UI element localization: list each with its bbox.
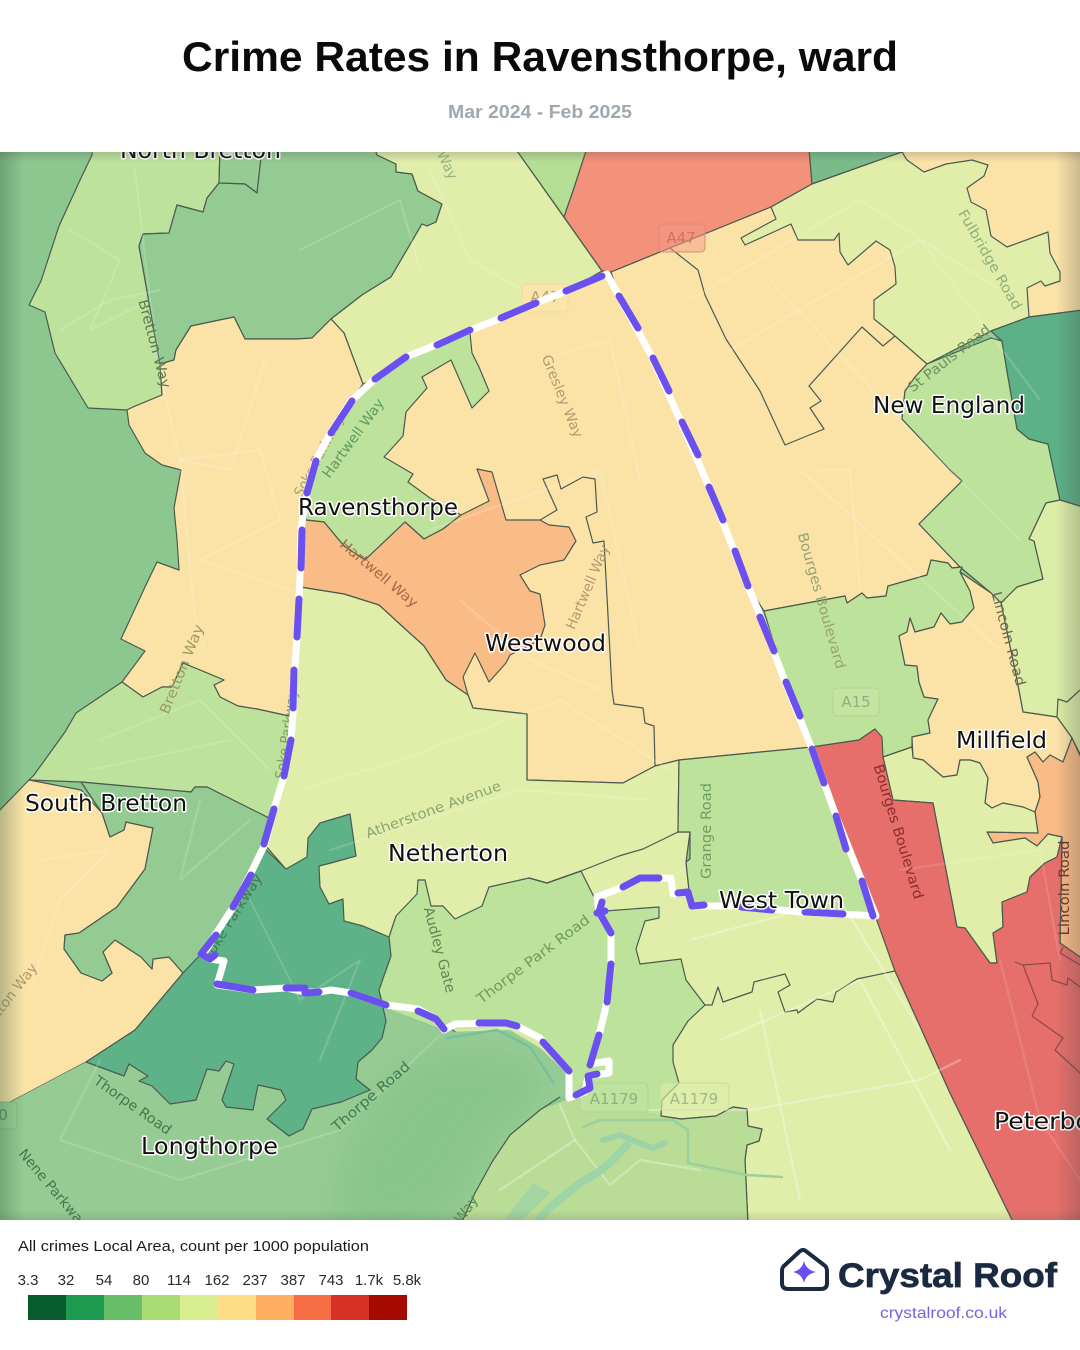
legend tick labels: 162 bbox=[204, 1272, 230, 1289]
road shields bbox=[0, 224, 879, 1129]
place labels: North Bretton bbox=[120, 138, 281, 164]
road labels: Soke Parkway bbox=[273, 689, 301, 780]
legend tick labels: 80 bbox=[133, 1272, 149, 1289]
road labels: St Pauls Road bbox=[905, 322, 994, 396]
place labels: Ravensthorpe bbox=[298, 495, 458, 521]
place labels bbox=[25, 138, 1080, 1160]
road labels: Bourges Boulevard bbox=[794, 531, 848, 671]
road shields: A15 bbox=[841, 693, 871, 711]
road labels: Atherstone Avenue bbox=[364, 778, 504, 842]
ward boundary: purple dashes bbox=[201, 276, 873, 1095]
road shields: A1179 bbox=[590, 1090, 638, 1108]
legend tick labels: 1.7k bbox=[355, 1272, 384, 1289]
legend tick labels: 3.3 bbox=[18, 1272, 38, 1289]
legend tick labels: 387 bbox=[280, 1272, 306, 1289]
place labels: Millfield bbox=[956, 728, 1047, 754]
subtitle: date range: Mar 2024 - Feb 2025 bbox=[448, 102, 632, 122]
road labels: Fulbridge Road bbox=[954, 207, 1025, 313]
legend tick labels: 114 bbox=[167, 1272, 191, 1289]
road labels: Thorpe Road bbox=[328, 1059, 414, 1136]
road labels: Audley Gate bbox=[420, 905, 458, 995]
road labels: Thorpe Road bbox=[90, 1072, 174, 1138]
road shields: A47 bbox=[666, 229, 696, 247]
road labels: Bretton Way bbox=[134, 298, 173, 390]
road labels: Thorpe Park Road bbox=[473, 912, 593, 1008]
logo wordmark: Crystal Roof bbox=[838, 1257, 1058, 1295]
legend tick labels: 237 bbox=[242, 1272, 268, 1289]
legend colour scale bbox=[28, 1295, 407, 1320]
place labels: Westwood bbox=[485, 631, 606, 657]
road labels: Hartwell Way bbox=[563, 543, 613, 632]
road labels: Nene Parkway bbox=[15, 1146, 91, 1233]
road labels: Bretton Way bbox=[157, 622, 208, 717]
legend title: All crimes Local Area, count per 1000 population bbox=[18, 1238, 369, 1255]
logo: Crystal Roof bbox=[782, 1250, 1058, 1322]
road labels bbox=[0, 148, 1073, 1233]
road labels: Lincoln Road bbox=[988, 590, 1028, 688]
place labels: South Bretton bbox=[25, 791, 187, 817]
river and ponds bbox=[447, 1030, 782, 1222]
road labels: Soke Parkway bbox=[199, 871, 266, 965]
road shields: A47 bbox=[530, 288, 560, 306]
place labels: New England bbox=[873, 393, 1025, 419]
place labels: West Town bbox=[719, 888, 844, 914]
website url: crystalroof.co.uk bbox=[880, 1305, 1008, 1322]
legend bbox=[18, 1238, 422, 1320]
legend tick labels: 54 bbox=[96, 1272, 112, 1289]
legend tick labels: 743 bbox=[318, 1272, 344, 1289]
road labels: Lincoln Road bbox=[1057, 841, 1073, 935]
boundary lines inside the areas bbox=[529, 248, 1080, 1073]
road labels: Gresley Way bbox=[538, 353, 586, 440]
legend tick labels bbox=[18, 1272, 422, 1289]
map edge vignette bbox=[0, 152, 1080, 1220]
ward boundary: white route bbox=[201, 274, 876, 1098]
place labels: Longthorpe bbox=[141, 1134, 278, 1160]
road labels: Way bbox=[452, 1193, 482, 1227]
road labels: Hartwell Way bbox=[336, 537, 421, 611]
road shields: A1179 bbox=[670, 1090, 718, 1108]
legend tick labels: 32 bbox=[58, 1272, 74, 1289]
icon: house with star bbox=[782, 1250, 827, 1289]
road labels: Soke Parkway bbox=[291, 413, 348, 500]
road network texture bbox=[30, 170, 1080, 1200]
legend tick labels: 5.8k bbox=[393, 1272, 422, 1289]
road labels: Bourges Boulevard bbox=[870, 763, 926, 901]
place labels: Netherton bbox=[388, 841, 508, 867]
road labels: Way bbox=[433, 148, 460, 182]
road labels: Grange Road bbox=[699, 783, 715, 879]
title: Crime Rates in Ravensthorpe, ward bbox=[182, 33, 898, 80]
road labels: Hartwell Way bbox=[320, 396, 388, 481]
